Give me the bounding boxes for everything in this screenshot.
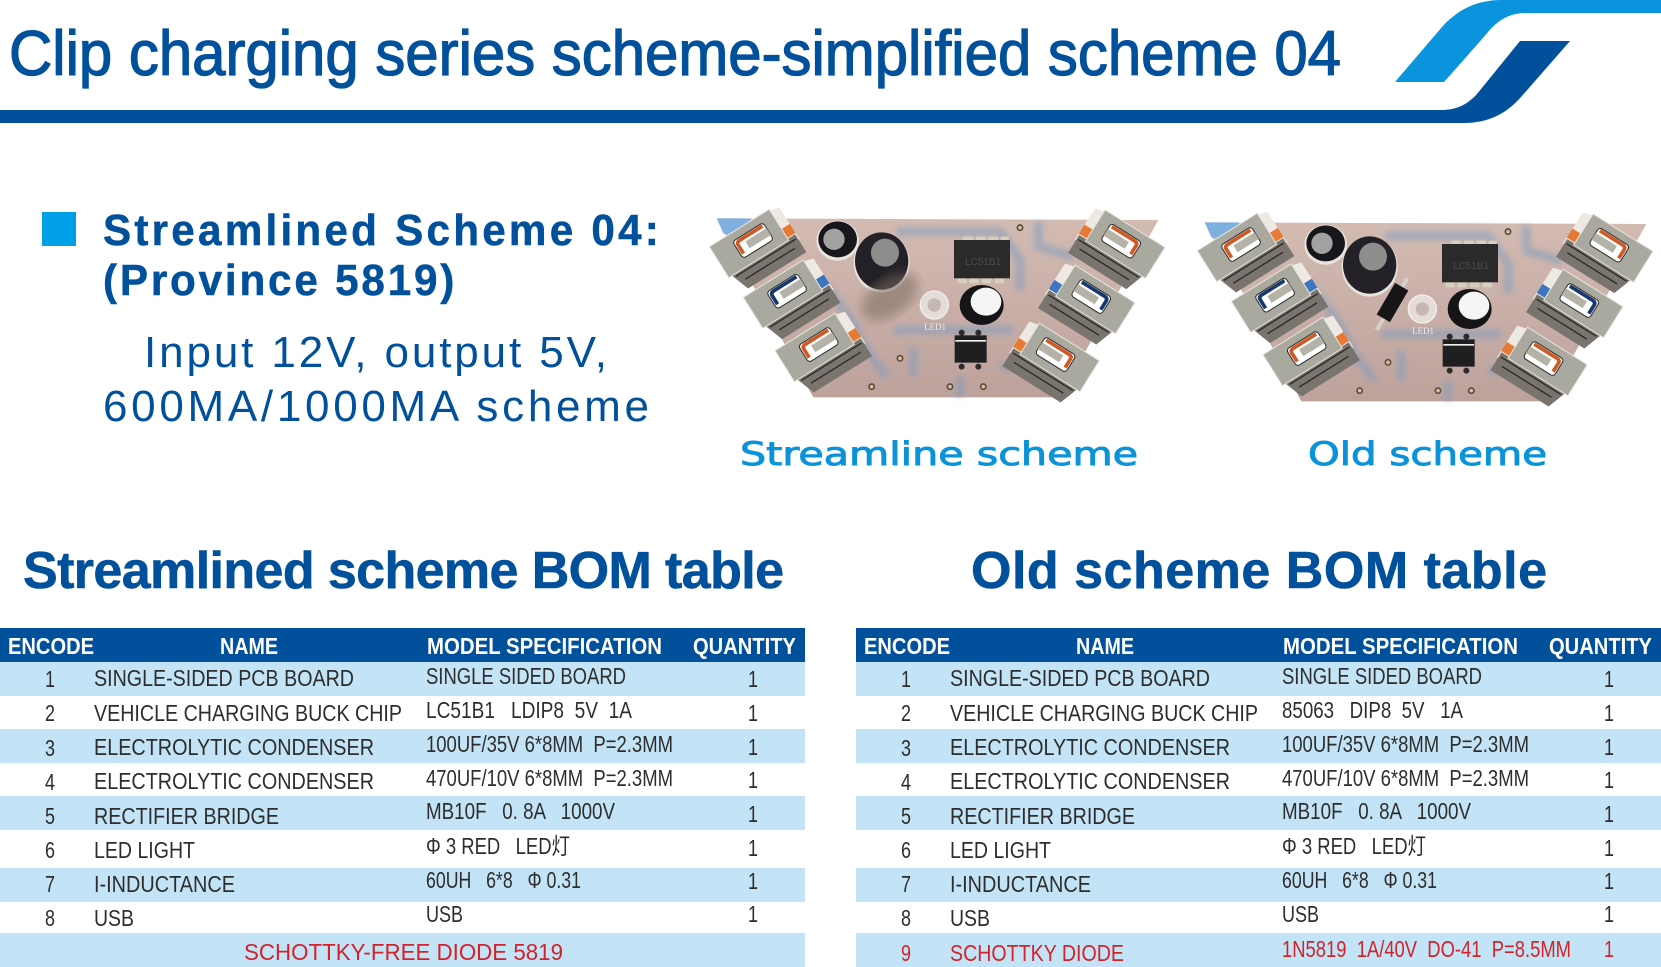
row 3: 3 [901,735,911,761]
row 9: schottky diode: 1 [1604,936,1614,962]
row 5 [0,796,805,830]
heading: streamlined scheme 04: (Province 5819) [103,256,454,305]
logo: light blue stripe [1395,0,1661,82]
heading: streamlined scheme 04 [103,206,659,305]
row 3 [0,729,805,763]
title: Clip charging series scheme-simplified scheme 04 [9,19,1341,89]
row 1: SINGLE-SIDED PCB BOARD [950,665,1210,691]
row 6: 1 [748,835,758,861]
heading: streamlined scheme 04: Streamlined Scheme 04: [103,206,659,255]
text block: input output description [103,328,649,431]
row 2: 85063 DIP8 5V 1A [1282,697,1464,723]
table header [856,628,1661,662]
row 4: 1 [1604,767,1614,793]
row 2 [901,697,1614,726]
caption: old scheme: Old scheme [1308,435,1547,473]
row 6 [901,833,1614,863]
row 2: 2 [901,700,911,726]
row 6: 1 [1604,835,1614,861]
row 7: I-INDUCTANCE [950,871,1091,897]
row 3: 1 [1604,734,1614,760]
table: streamlined scheme BOM [0,628,805,967]
row 4: ELECTROLYTIC CONDENSER [94,768,374,794]
table header: NAME [220,633,278,659]
row 3: 3 [45,735,55,761]
row 7: 1 [748,868,758,894]
row: schottky-free note [0,933,805,967]
row 4: 4 [45,769,55,795]
table header: MODEL SPECIFICATION [427,633,662,659]
logo and header rule: dark blue stripe [0,41,1570,123]
icon: blue square bullet [42,212,76,246]
row 4 [901,765,1614,795]
row 7: I-INDUCTANCE [94,871,235,897]
row 8: 1 [748,901,758,927]
text block: input output description: 600MA/1000MA scheme [103,382,649,431]
row 8: USB [94,905,134,931]
table header: MODEL SPECIFICATION [1283,633,1518,659]
row 9: schottky diode: 9 [901,940,911,966]
row 4: ELECTROLYTIC CONDENSER [950,768,1230,794]
row 3: 100UF/35V 6*8MM P=2.3MM [426,731,673,757]
table header: ENCODE [8,633,94,659]
row 2: 1 [1604,700,1614,726]
row 5: 5 [901,803,911,829]
row 1: 1 [1604,666,1614,692]
row 5: 1 [1604,801,1614,827]
row 8: 8 [901,905,911,931]
logo and header band [0,0,1661,123]
table: old scheme BOM [856,628,1661,967]
row 2 [45,697,758,726]
row 2: VEHICLE CHARGING BUCK CHIP [94,700,402,726]
row 8: USB [1282,901,1319,927]
photo: old scheme circuit board: LC51B1 [1453,261,1490,272]
row 4: 1 [748,767,758,793]
row 6: LED LIGHT [94,837,195,863]
row 8: USB [426,901,463,927]
row 5: RECTIFIER BRIDGE [950,803,1135,829]
row 9: schottky diode [856,933,1661,967]
text block: input output description: Input 12V, output 5V, [144,328,607,377]
row 6 [45,833,758,863]
row 7: 7 [45,871,55,897]
row 1: 1 [748,666,758,692]
row 8: 8 [45,905,55,931]
row: schottky-free note: SCHOTTKY-FREE DIODE 5819 [244,939,563,965]
row 3: 100UF/35V 6*8MM P=2.3MM [1282,731,1529,757]
row 7: 1 [1604,868,1614,894]
table header [0,628,805,662]
row 7: 7 [901,871,911,897]
row 5 [856,796,1661,830]
row 4: 470UF/10V 6*8MM P=2.3MM [1282,765,1529,791]
row 7 [856,867,1661,902]
row 4: 470UF/10V 6*8MM P=2.3MM [426,765,673,791]
row 2: LC51B1 LDIP8 5V 1A [426,697,633,723]
heading: streamlined scheme BOM table: Streamlined scheme BOM table [23,542,784,600]
row 7: 60UH 6*8 Φ 0.31 [426,867,581,893]
row 6: 6 [901,837,911,863]
row 1: SINGLE-SIDED PCB BOARD [94,665,354,691]
row 8 [901,901,1614,931]
row 5: RECTIFIER BRIDGE [94,803,279,829]
row 1: 1 [901,666,911,692]
row 2: 2 [45,700,55,726]
row 6: LED LIGHT [950,837,1051,863]
row 3: ELECTROLYTIC CONDENSER [950,734,1230,760]
row 9: schottky diode: 1N5819 1A/40V DO-41 P=8.5MM [1282,936,1571,962]
table header: ENCODE [864,633,950,659]
row 3 [856,729,1661,763]
row 1: SINGLE SIDED BOARD [1282,663,1482,689]
photo: streamline scheme circuit board [709,204,1165,408]
row 6: 6 [45,837,55,863]
row 1 [856,662,1661,696]
row 3: ELECTROLYTIC CONDENSER [94,734,374,760]
row 5: MB10F 0. 8A 1000V [426,798,616,824]
row 1 [0,662,805,696]
row 1: 1 [45,666,55,692]
row 5: 1 [748,801,758,827]
photo: streamline scheme circuit board: LC51B1 [965,257,1002,268]
row 2: VEHICLE CHARGING BUCK CHIP [950,700,1258,726]
row 6: Φ 3 RED LED灯 [1282,833,1426,859]
row 5: MB10F 0. 8A 1000V [1282,798,1472,824]
caption: streamline scheme: Streamline scheme [740,435,1138,473]
row 7: 60UH 6*8 Φ 0.31 [1282,867,1437,893]
photo: old scheme circuit board [1197,208,1653,412]
row 7 [0,867,805,902]
row 4 [45,765,758,795]
heading: old scheme BOM table: Old scheme BOM table [971,542,1547,600]
row 8: 1 [1604,901,1614,927]
row 4: 4 [901,769,911,795]
table header: NAME [1076,633,1134,659]
row 5: 5 [45,803,55,829]
row 2: 1 [748,700,758,726]
table header: QUANTITY [693,633,796,659]
row 8: USB [950,905,990,931]
row 8 [45,901,758,931]
row 3: 1 [748,734,758,760]
row 6: Φ 3 RED LED灯 [426,833,570,859]
row 9: schottky diode: SCHOTTKY DIODE [950,940,1124,966]
row 1: SINGLE SIDED BOARD [426,663,626,689]
